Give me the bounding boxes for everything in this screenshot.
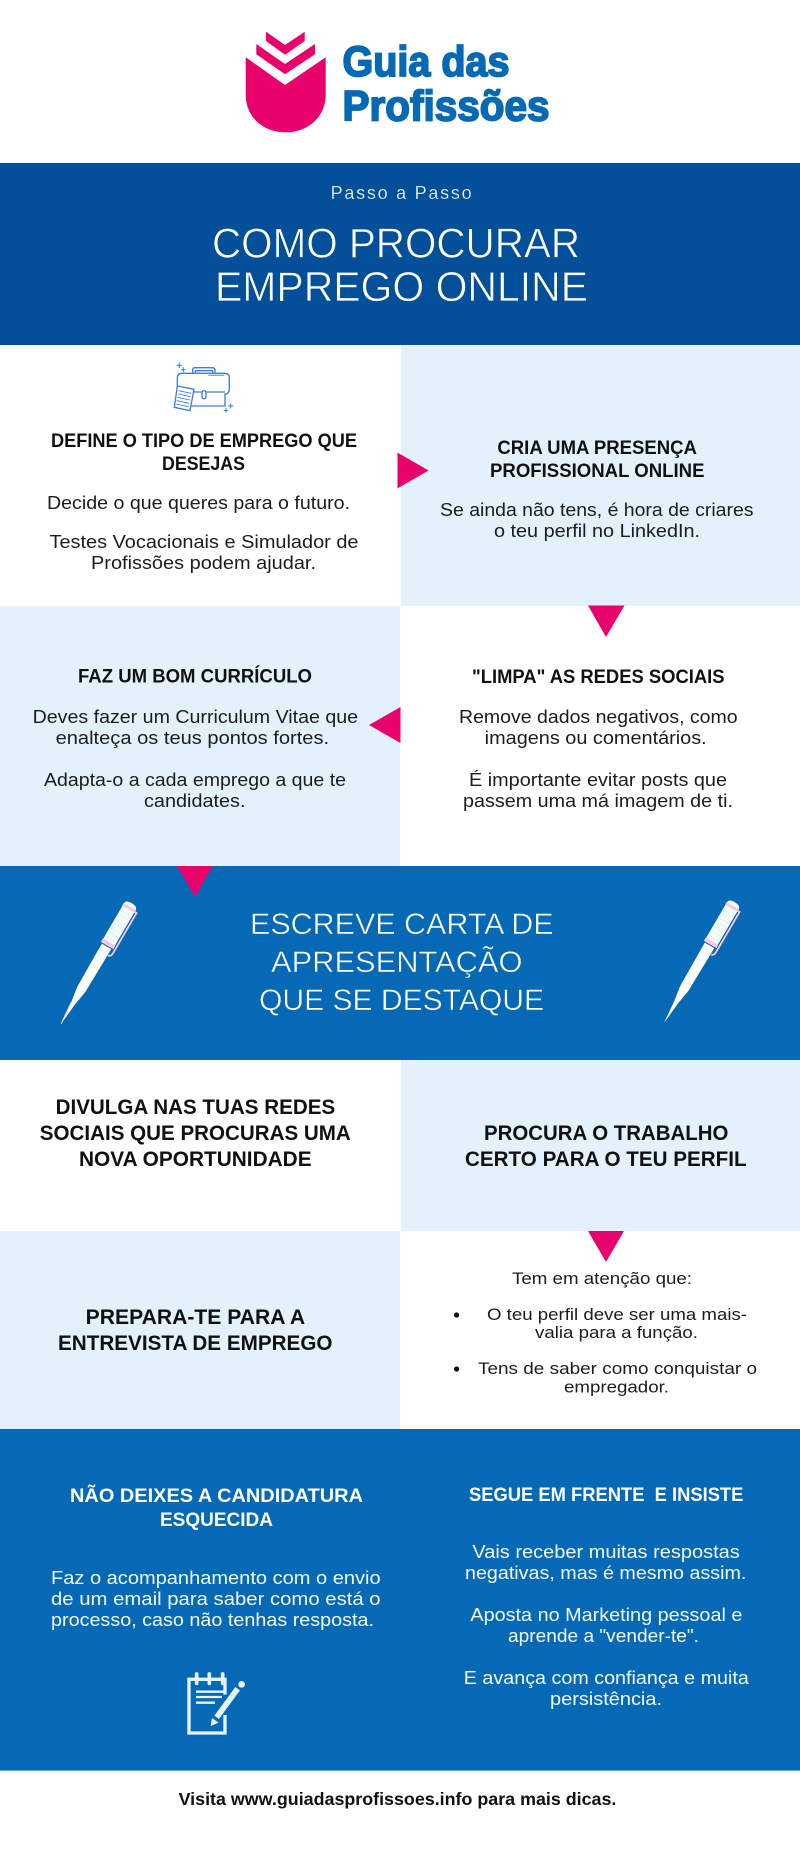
body text: enalteça os teus pontos fortes.	[56, 727, 329, 748]
body text	[440, 499, 754, 541]
panel: title banner	[0, 163, 800, 345]
body text: Deves fazer um Curriculum Vitae que	[33, 706, 358, 727]
body text: segue em frente: persistência.	[550, 1688, 662, 1709]
heading: DEFINE O TIPO DE EMPREGO QUE	[51, 431, 357, 452]
body text: É importante evitar posts que	[469, 769, 727, 790]
heading: CERTO PARA O TEU PERFIL	[465, 1148, 747, 1171]
panel: presença profissional online	[401, 345, 800, 606]
body text: segue em frente: E avança com confiança e muita	[464, 1667, 750, 1688]
body text: Testes Vocacionais e Simulador de	[50, 531, 358, 552]
body text: o teu perfil no LinkedIn.	[494, 520, 700, 541]
title: COMO PROCURAR	[212, 220, 580, 266]
panel: prepara-te para a entrevista	[0, 1231, 400, 1429]
logo wordmark	[342, 38, 550, 130]
icon: briefcase	[174, 363, 233, 413]
body text: segue em frente: negativas, mas é mesmo assim.	[465, 1562, 746, 1583]
title: EMPREGO ONLINE	[215, 263, 588, 310]
icon: notepad and pencil	[189, 1674, 245, 1733]
heading: DESEJAS	[162, 454, 245, 475]
heading: APRESENTAÇÃO	[271, 945, 522, 979]
bullet list: Tens de saber como conquistar o	[478, 1359, 757, 1378]
body text: candidates.	[144, 790, 246, 811]
heading: PROFISSIONAL ONLINE	[490, 461, 704, 482]
title	[212, 220, 588, 310]
body text: Remove dados negativos, como	[459, 706, 738, 727]
heading: PREPARA-TE PARA A	[86, 1306, 305, 1329]
body text: passem uma má imagem de ti.	[463, 790, 733, 811]
body text	[47, 492, 358, 573]
heading: PROCURA O TRABALHO	[484, 1122, 728, 1145]
panel: bom currículo	[0, 606, 400, 866]
arrow: left	[369, 707, 400, 743]
heading	[40, 1096, 351, 1171]
arrow: down into banner	[177, 866, 213, 897]
body text: segue em frente: aprende a "vender-te".	[508, 1625, 699, 1646]
heading: NOVA OPORTUNIDADE	[79, 1148, 312, 1171]
heading	[490, 438, 704, 482]
heading: DIVULGA NAS TUAS REDES	[56, 1096, 335, 1119]
icon: right pen	[658, 899, 743, 1028]
heading: "LIMPA" AS REDES SOCIAIS	[472, 667, 724, 688]
heading: SOCIAIS QUE PROCURAS UMA	[40, 1122, 351, 1145]
logo wordmark: Guia das	[342, 38, 510, 86]
intro text: Tem em atenção que:	[512, 1269, 692, 1288]
heading: candidatura: ESQUECIDA	[160, 1509, 273, 1531]
arrow: down to limpa	[588, 606, 624, 637]
heading: candidatura	[70, 1484, 363, 1531]
body text: Decide o que queres para o futuro.	[47, 492, 350, 513]
panel: tem em atenção	[400, 1231, 800, 1429]
bullet list	[454, 1305, 757, 1396]
heading: FAZ UM BOM CURRÍCULO	[78, 666, 312, 688]
panel: procura o trabalho certo	[401, 1060, 800, 1231]
panel: carta de apresentação banner	[0, 866, 800, 1060]
body text	[33, 706, 358, 811]
body text: candidatura: de um email para saber como está o	[51, 1588, 381, 1609]
heading	[250, 908, 554, 1017]
heading	[51, 431, 357, 475]
body text	[459, 706, 738, 811]
arrow: right	[398, 453, 429, 488]
logo	[246, 32, 549, 132]
body text: candidatura: Faz o acompanhamento com o envio	[51, 1567, 381, 1588]
body text: candidatura: processo, caso não tenhas resposta.	[51, 1609, 374, 1630]
heading: CRIA UMA PRESENÇA	[497, 438, 697, 459]
heading	[465, 1122, 747, 1171]
heading: candidatura: NÃO DEIXES A CANDIDATURA	[70, 1484, 363, 1507]
panel: limpa as redes sociais	[400, 606, 800, 866]
panel: candidatura e insistência	[0, 1429, 800, 1771]
arrow: down	[588, 1231, 624, 1262]
bullet list: O teu perfil deve ser uma mais-	[487, 1305, 747, 1324]
body text: Adapta-o a cada emprego a que te	[44, 769, 346, 790]
subtitle: Passo a Passo	[331, 183, 472, 203]
body text: Profissões podem ajudar.	[91, 552, 316, 573]
heading	[58, 1306, 332, 1355]
panel: divulga nas redes sociais	[0, 1060, 401, 1231]
heading: QUE SE DESTAQUE	[259, 984, 544, 1017]
bullet list: empregador.	[564, 1378, 669, 1396]
footer text: Visita www.guiadasprofissoes.info para mais dicas.	[179, 1789, 616, 1809]
icon: pink tulip	[246, 32, 326, 132]
body text: segue em frente: Aposta no Marketing pessoal e	[470, 1604, 742, 1625]
panel: define o tipo de emprego	[0, 345, 401, 606]
body text: segue em frente: Vais receber muitas respostas	[472, 1541, 740, 1562]
body text: candidatura	[51, 1567, 381, 1630]
heading: ESCREVE CARTA DE	[250, 908, 554, 941]
heading: segue em frente: SEGUE EM FRENTE E INSISTE	[469, 1484, 743, 1506]
icon: left pen	[55, 900, 140, 1029]
heading: ENTREVISTA DE EMPREGO	[58, 1332, 332, 1355]
body text: imagens ou comentários.	[485, 727, 707, 748]
logo wordmark: Profissões	[342, 82, 550, 130]
bullet list: valia para a função.	[535, 1323, 698, 1342]
body text: Se ainda não tens, é hora de criares	[440, 499, 754, 520]
body text: segue em frente	[464, 1541, 750, 1709]
